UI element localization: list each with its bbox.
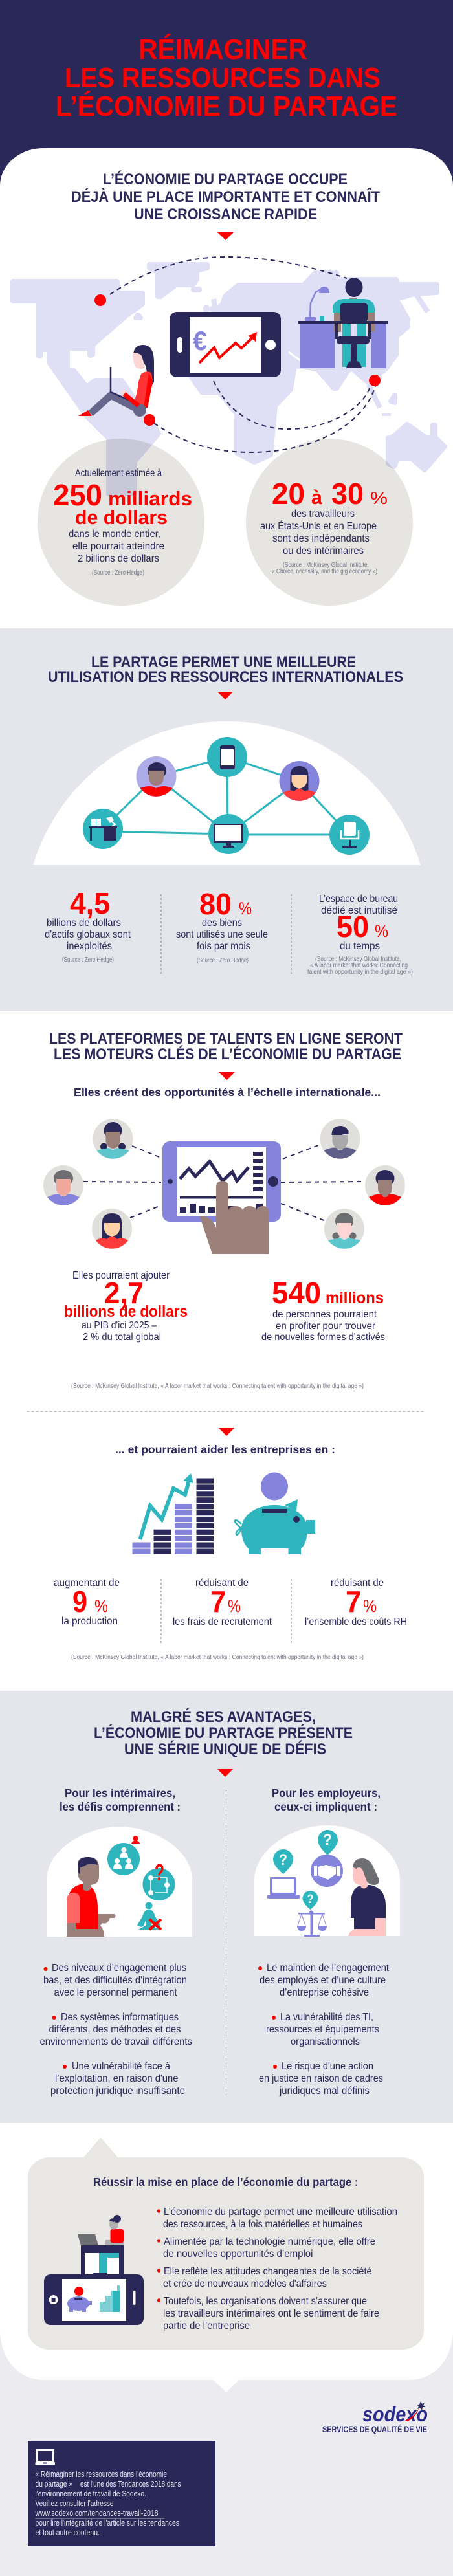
icon: laptop: [267, 1877, 300, 1899]
question pins: ?: [323, 1831, 332, 1849]
list: employer challenges: des employés et d’une culture: [260, 1975, 386, 1986]
dividers: [161, 1579, 291, 1644]
icon: meditation crossed: [137, 1902, 161, 1930]
avatar: woman long hair: [92, 1209, 132, 1249]
callout background: [28, 2137, 424, 2350]
stat: 50 %: %: [375, 921, 388, 941]
stat circle left background: [38, 439, 204, 606]
stat: 250 milliards: 250: [53, 478, 102, 512]
heading: LES MOTEURS CLÉS DE L’ÉCONOMIE DU PARTAGE: [54, 1045, 401, 1063]
illustration: worker challenges: [47, 1827, 192, 1937]
stat circle right background: [246, 439, 413, 606]
list: worker challenges: protection juridique insuffisante: [50, 2086, 185, 2097]
stat: 540 millions: millions: [326, 1289, 384, 1307]
list: success factors: de nouvelles opportunités d’emploi: [163, 2249, 313, 2260]
stat: 4,5: inexploités: [67, 941, 112, 952]
icon: woman with laptop: [78, 345, 154, 417]
map pins: [94, 294, 381, 426]
stat: 80 %: [176, 887, 268, 964]
panel: economy growth: [0, 148, 453, 628]
info text: du partage »: [35, 2480, 72, 2489]
stat: 9 %: %: [94, 1596, 108, 1616]
list: worker challenges: [40, 1963, 192, 2097]
list: worker challenges: avec le personnel permanent: [54, 1987, 177, 1998]
heading: [49, 1030, 403, 1063]
subheading: temps: Pour les intérimaires,: [65, 1787, 175, 1800]
list: employer challenges: Le risque d'une action: [282, 2061, 373, 2072]
stat: 80 %: des biens: [202, 918, 242, 929]
list: employer challenges: ressources et équipements: [266, 2024, 379, 2035]
avatar: man grey: [320, 1119, 360, 1159]
stat: 50 %: du temps: [340, 941, 380, 952]
list: employer challenges: Le maintien de l’engagement: [267, 1963, 390, 1974]
stat: 2,7 billions: [64, 1270, 188, 1343]
illustration: employer challenges: [254, 1825, 400, 1937]
icon: pointing hand: [199, 1181, 269, 1254]
arrow: down triangle: [219, 1072, 235, 1080]
stat: 20 à 30 %: « Choice, necessity, and the gig economy »): [272, 568, 377, 575]
heading: UNE CROISSANCE RAPIDE: [134, 206, 317, 223]
title: RÉIMAGINER: [138, 33, 307, 65]
stat: 250 milliards: 2 billions de dollars: [78, 553, 159, 564]
heading: L’ÉCONOMIE DU PARTAGE OCCUPE: [103, 170, 348, 188]
stat: 80 %: sont utilisés une seule: [176, 929, 268, 940]
info text: [35, 2470, 181, 2537]
arrow: down triangle: [217, 692, 233, 699]
heading: UTILISATION DES RESSOURCES INTERNATIONALES: [48, 668, 403, 686]
man: [67, 1857, 115, 1937]
stat: 20 à 30 %: ou des intérimaires: [283, 545, 364, 556]
stat: 20 à 30 %: 20: [272, 477, 305, 511]
stat: 50 %: (Source : McKinsey Global Institute,: [315, 956, 401, 963]
stat: 50 %: [307, 894, 413, 976]
icon: tablet with chart: [162, 1141, 281, 1222]
header band: [0, 0, 453, 191]
stat: 20 à 30 %: des travailleurs: [291, 509, 355, 520]
logo: sodexo: SERVICES DE QUALITÉ DE VIE: [322, 2425, 427, 2434]
stat: 540 millions: en profiter pour trouver: [276, 1321, 376, 1332]
stat: 20 à 30 %: aux États-Unis et en Europe: [260, 520, 377, 532]
avatar: woman teal shirt: [93, 1119, 133, 1159]
subheading: Elles créent des opportunités à l’échelle internationale...: [74, 1086, 381, 1099]
stat: 20 à 30 %: [260, 477, 388, 575]
dashed connectors: [110, 257, 375, 452]
stat: 250 milliards: elle pourrait atteindre: [72, 541, 164, 552]
stat: 2,7 billions: 2,7: [104, 1276, 144, 1310]
stat: 2,7 billions: billions de dollars: [64, 1303, 188, 1321]
question pins: ?: [279, 1851, 287, 1869]
heading: DÉJÀ UNE PLACE IMPORTANTE ET CONNAÎT: [71, 188, 380, 206]
info text: « Réimaginer les ressources dans l'économie: [35, 2470, 167, 2479]
avatar: man red shirt: [365, 1165, 405, 1205]
stat: 2,7 billions: au PIB d'ici 2025 –: [82, 1320, 157, 1331]
stat: 7 % recruitment: 7: [210, 1585, 226, 1618]
stat: 50 %: 50: [337, 910, 369, 943]
list: employer challenges: d’entreprise cohésive: [280, 1987, 369, 1998]
list: employer challenges: [258, 1963, 390, 2097]
stat: 7 % recruitment: réduisant de: [195, 1578, 249, 1589]
avatar: woman grey hair: [324, 1209, 364, 1249]
stat: 540 millions: de personnes pourraient: [272, 1309, 377, 1320]
heading: [94, 1708, 353, 1758]
title: LES RESSOURCES DANS: [65, 63, 381, 94]
stat: 4,5: d'actifs globaux sont: [45, 929, 131, 940]
icon: scales: [297, 1910, 327, 1937]
logo: sodexo: [322, 2401, 428, 2434]
stat: 4,5: (Source : Zero Hedge): [62, 956, 114, 963]
map: red sea: [289, 352, 305, 364]
icon: process question: ?: [155, 1859, 164, 1886]
list: success factors: et crée de nouveaux modèles d'affaires: [163, 2278, 327, 2289]
stat: 7 % recruitment: les frais de recrutement: [173, 1616, 272, 1627]
list: success factors: Alimentée par la technologie numérique, elle offre: [164, 2236, 375, 2247]
info box: [28, 2441, 215, 2546]
panel: talent platforms: [0, 1011, 453, 1691]
icon: process question: [142, 1859, 175, 1900]
icon: handshake: [311, 1855, 343, 1887]
stat: 250 milliards: [53, 468, 192, 577]
stat: 2,7 billions: Elles pourraient ajouter: [72, 1270, 170, 1281]
stat: 7 % HR costs: %: [363, 1596, 377, 1616]
stat: 250 milliards: milliards: [108, 487, 192, 510]
stat: 50 %: « A labor market that works: Connecting: [310, 962, 408, 969]
stat: 80 %: (Source : Zero Hedge): [197, 957, 249, 964]
stat: 80 %: fois par mois: [197, 941, 250, 952]
info text: est l'une des Tendances 2018 dans: [80, 2480, 181, 2489]
node: man: [136, 756, 176, 797]
arrow: down triangle: [219, 1428, 234, 1436]
stat: 20 à 30 %: %: [370, 489, 388, 508]
stat: 540 millions: 540: [272, 1276, 321, 1310]
callout heading: Réussir la mise en place de l’économie du partage :: [93, 2175, 359, 2188]
list: worker challenges: bas, et des difficultés d'intégration: [43, 1975, 187, 1986]
stat: 20 à 30 %: sont des indépendants: [272, 533, 370, 544]
stat: 250 milliards: dans le monde entier,: [69, 529, 160, 540]
list: success factors: des ressources, à la fois matérielles et humaines: [163, 2219, 362, 2230]
panel: international resources: [0, 628, 453, 1011]
subheading: employers: Pour les employeurs,: [272, 1787, 381, 1800]
source: (Source : McKinsey Global Institute, « A labor market that works : Connecting talent with opportunity in the digital age »): [71, 1383, 364, 1390]
panel: success speech bubble: [0, 2123, 453, 2392]
subheading: ... et pourraient aider les entreprises en :: [115, 1443, 335, 1456]
stat: 250 milliards: (Source : Zero Hedge): [92, 569, 144, 577]
question pins: ?: [307, 1893, 313, 1906]
list: success factors: partie de l’entreprise: [163, 2320, 250, 2331]
list: worker challenges: Une vulnérabilité face à: [72, 2061, 170, 2072]
stat: 9 %: 9: [72, 1585, 87, 1618]
avatar: man grey hair: [43, 1165, 83, 1205]
stat: 20 à 30 %: 30: [331, 477, 364, 511]
stat: 250 milliards: Actuellement estimée à: [75, 468, 162, 479]
stat: 9 %: [54, 1578, 120, 1627]
stat: 250 milliards: de dollars: [75, 506, 168, 529]
info text: Veuillez consulter l'adresse: [35, 2499, 114, 2508]
stat: 80 %: 80: [199, 887, 232, 921]
info text: pour lire l'intégralité de l'article sur les tendances: [35, 2518, 179, 2527]
stat: 80 %: %: [239, 899, 252, 918]
title: [56, 33, 397, 122]
heading: [48, 654, 403, 686]
heading: LES PLATEFORMES DE TALENTS EN LIGNE SERONT: [49, 1030, 403, 1048]
stat: 9 %: augmentant de: [54, 1578, 120, 1589]
stat: 50 %: L’espace de bureau: [319, 894, 398, 905]
panel: challenges: [0, 1691, 453, 2123]
list: worker challenges: Des systèmes informatiques: [61, 2012, 179, 2023]
list: employer challenges: juridiques mal définis: [279, 2086, 370, 2097]
list: worker challenges: Des niveaux d’engagement plus: [52, 1963, 186, 1974]
icon: phone with rising chart: [170, 312, 281, 377]
list: success factors: Elle reflète les attitudes changeantes de la société: [164, 2266, 372, 2277]
woman: [348, 1858, 386, 1936]
stat: 4,5: [45, 886, 131, 963]
heading: LE PARTAGE PERMET UNE MEILLEURE: [91, 654, 356, 671]
stat: 540 millions: [261, 1276, 385, 1343]
stat: 7 % HR costs: réduisant de: [331, 1578, 384, 1589]
node: desk: [83, 809, 123, 849]
logo: sodexo: sodexo: [362, 2403, 428, 2426]
stat: 2,7 billions: 2 % du total global: [83, 1332, 161, 1343]
subheading: temps: [60, 1787, 181, 1813]
stat: 7 % HR costs: l’ensemble des coûts RH: [305, 1616, 407, 1627]
arrow: down triangle: [217, 1769, 233, 1777]
stat: 9 %: la production: [61, 1616, 118, 1627]
network links: [103, 757, 349, 835]
subheading: employers: [272, 1787, 381, 1813]
node: monitor: [208, 814, 249, 854]
heading: L’ÉCONOMIE DU PARTAGE PRÉSENTE: [94, 1724, 353, 1742]
stat: 7 % HR costs: 7: [346, 1585, 361, 1618]
stat: 20 à 30 %: à: [311, 486, 323, 509]
list: success factors: Toutefois, les organisations doivent s’assurer que: [164, 2296, 367, 2307]
list: employer challenges: organisationnels: [291, 2036, 360, 2047]
heading: UNE SÉRIE UNIQUE DE DÉFIS: [124, 1740, 326, 1758]
title: L’ÉCONOMIE DU PARTAGE: [56, 90, 397, 122]
stat: 50 %: dédié est inutilisé: [321, 905, 397, 916]
stat: 540 millions: de nouvelles formes d'activés: [261, 1332, 385, 1343]
list: success factors: L’économie du partage permet une meilleure utilisation: [164, 2207, 397, 2218]
icon: laptop: [35, 2449, 55, 2465]
dashed spokes: [83, 1145, 364, 1221]
heading: [71, 170, 380, 223]
list: worker challenges: différents, des méthodes et des: [49, 2024, 181, 2035]
illustration: person on phone desk: [44, 2215, 144, 2325]
icon: coin stacks with arrow: [132, 1473, 214, 1554]
stat: 4,5: billions de dollars: [47, 918, 121, 929]
icon: person at desk: [298, 278, 388, 368]
subheading: employers: ceux-ci impliquent :: [274, 1800, 377, 1813]
icon: team hierarchy: [107, 1836, 140, 1875]
world map: [13, 265, 445, 494]
list: worker challenges: environnements de travail différents: [40, 2036, 192, 2047]
stat: 7 % recruitment: [173, 1578, 272, 1627]
subheading: temps: les défis comprennent :: [60, 1800, 181, 1813]
list: employer challenges: en justice en raison de cadres: [259, 2073, 383, 2084]
arrow: down triangle: [217, 232, 234, 240]
stat: 7 % recruitment: %: [228, 1596, 241, 1616]
info text: et tout autre contenu.: [35, 2528, 100, 2537]
node: chair: [329, 815, 370, 855]
heading: MALGRÉ SES AVANTAGES,: [131, 1708, 316, 1726]
node: woman: [280, 761, 320, 801]
icon: piggy bank: [235, 1473, 315, 1554]
list: success factors: [157, 2207, 397, 2331]
list: employer challenges: La vulnérabilité des TI,: [280, 2012, 373, 2023]
question pins: [273, 1830, 338, 1910]
list: worker challenges: l’exploitation, en raison d'une: [55, 2073, 179, 2084]
list: success factors: les travailleurs intérimaires ont le sentiment de faire: [163, 2308, 379, 2319]
dividers: [161, 894, 291, 975]
stat: 4,5: 4,5: [70, 886, 110, 920]
node: phone: [207, 737, 247, 777]
stat: 20 à 30 %: (Source : McKinsey Global Institute,: [283, 562, 369, 569]
network dome: [33, 721, 421, 865]
stat: 50 %: talent with opportunity in the digital age »): [307, 969, 413, 976]
stat: 7 % HR costs: [305, 1578, 407, 1627]
info text: www.sodexo.com/tendances-travail-2018: [35, 2509, 159, 2518]
icon: phone with rising chart: €: [193, 325, 207, 356]
source: (Source : McKinsey Global Institute, « A labor market that works : Connecting talent with opportunity in the digital age »): [71, 1654, 364, 1661]
info text: l'environnement de travail de Sodexo.: [35, 2489, 146, 2498]
